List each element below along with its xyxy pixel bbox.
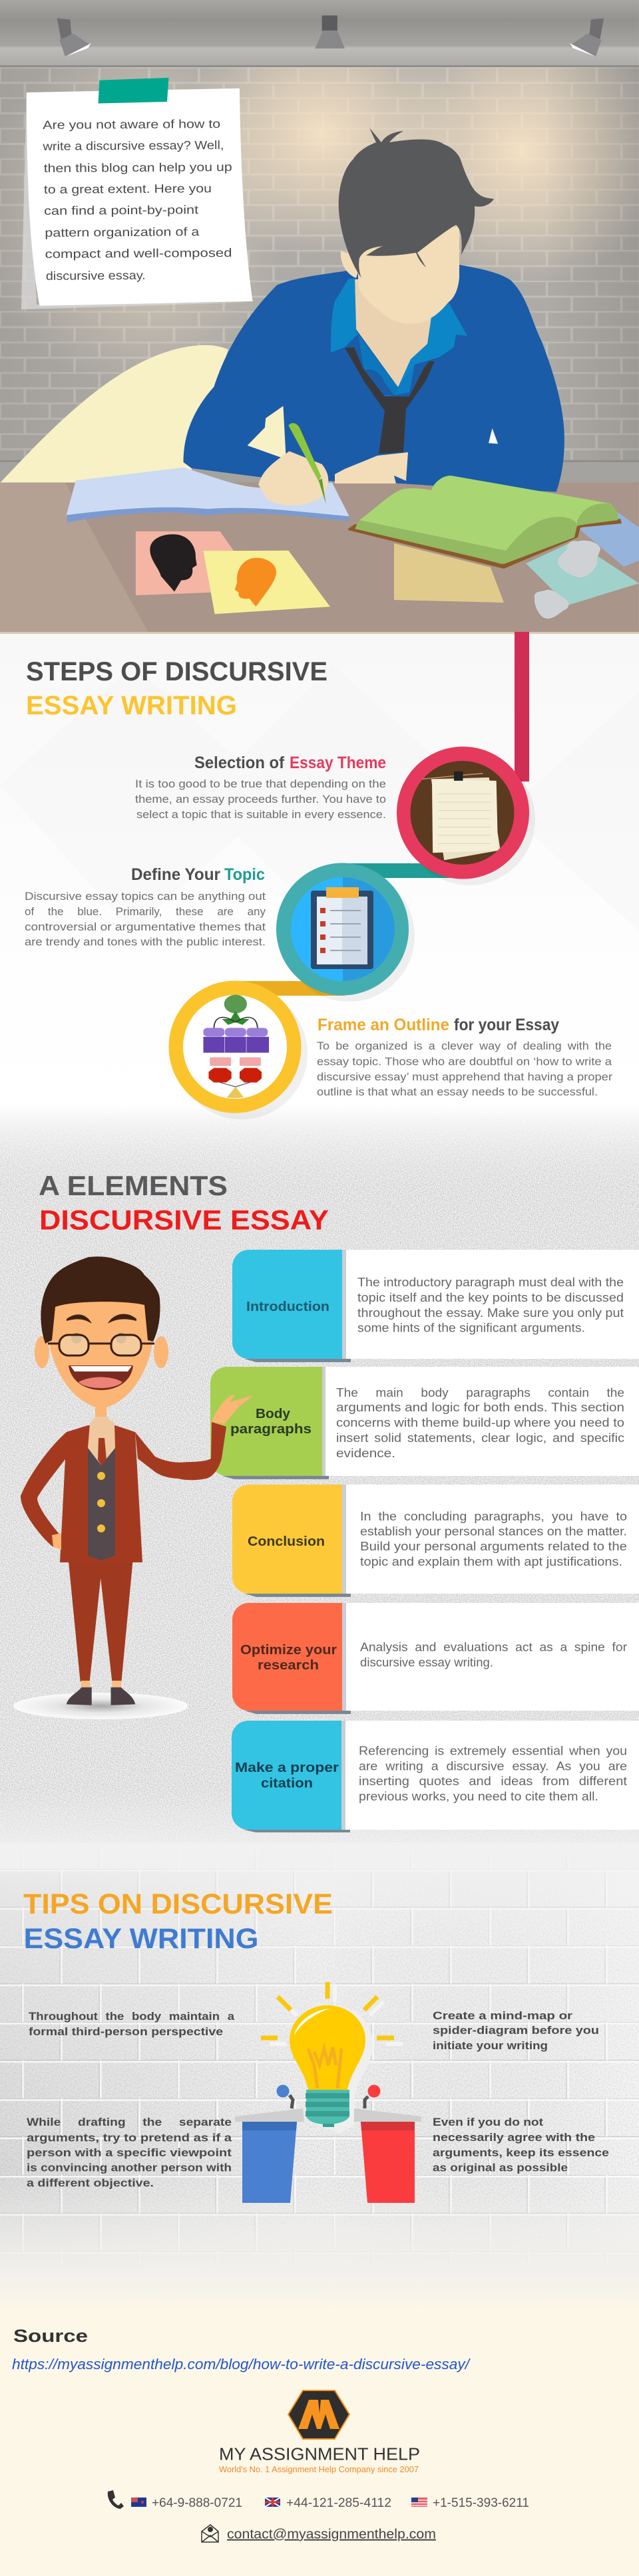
card: make a proper citation: Referencing is extremely essential when you <box>359 1745 627 1758</box>
desk <box>0 482 639 633</box>
green book <box>348 476 622 569</box>
text: tip 2: person with a specific viewpoint <box>27 2146 232 2159</box>
text: tip 3: spider-diagram before you <box>433 2024 599 2037</box>
left arm <box>21 1432 67 1547</box>
shirt <box>183 265 564 492</box>
panel: hero illustration <box>0 0 639 633</box>
collar <box>331 278 358 353</box>
text: tip 4: as original as possible <box>433 2162 568 2174</box>
intro text: compact and well-composed <box>45 246 232 261</box>
face <box>358 226 459 324</box>
lamp light cone <box>0 345 228 483</box>
intro text: pattern organization of a <box>45 225 200 239</box>
card: body paragraphs: insert solid statements, clear logic, and specific <box>336 1431 624 1445</box>
eyes <box>71 1333 82 1344</box>
logo: My Assignment Help: World's No. 1 Assignment Help Company since 2007 <box>219 2464 419 2474</box>
heading: tips: ESSAY WRITING <box>24 1923 258 1955</box>
intro text: write a discursive essay? Well, <box>42 138 224 153</box>
contact: phone numbers: +64-9-888-0721 <box>152 2496 242 2510</box>
filament <box>308 2047 341 2088</box>
card: introduction <box>232 1250 639 1362</box>
icon: phone <box>108 2490 124 2509</box>
text: step 1: It is too good to be true that depending on the <box>135 778 386 790</box>
intro text: can find a point-by-point <box>44 203 198 217</box>
vest <box>88 1447 115 1560</box>
glasses <box>59 1335 141 1356</box>
card: conclusion: In the concluding paragraphs, you have to <box>360 1510 627 1523</box>
card: body paragraphs: evidence. <box>336 1447 395 1460</box>
icon: right spotlight <box>570 19 604 57</box>
card: optimize your research <box>232 1603 639 1714</box>
tape <box>99 78 168 103</box>
panel: tips section background <box>0 1842 639 2576</box>
writing hand and pen <box>258 423 328 505</box>
heading: steps: ESSAY WRITING <box>26 691 237 720</box>
card: conclusion: topic and explain them with apt justifications. <box>360 1555 622 1568</box>
text: step 1: select a topic that is suitable in every essence. <box>136 808 386 821</box>
card: introduction: throughout the essay. Make sure you only put <box>357 1306 624 1320</box>
bulb <box>290 2005 365 2090</box>
text: step 3: essay topic. Those who are doubtful on ‘how to write a <box>317 1056 612 1068</box>
text: tip 2: is convincing another person with <box>27 2162 232 2174</box>
floor shadow <box>13 1693 188 1719</box>
source block: Source <box>13 2326 88 2346</box>
card: conclusion: Build your personal arguments related to the <box>360 1540 627 1553</box>
jacket <box>60 1425 142 1562</box>
icon: envelope <box>202 2525 218 2542</box>
icon: centre spotlight <box>315 15 345 49</box>
note: paper with intro text <box>21 78 253 309</box>
intro text: Are you not aware of how to <box>43 117 220 132</box>
logo: My Assignment Help: MY ASSIGNMENT HELP <box>219 2444 420 2464</box>
text: step 3: Frame an Outline <box>318 1016 449 1034</box>
ear <box>341 251 363 278</box>
card: introduction: The introductory paragraph must deal with the <box>357 1276 624 1289</box>
ears <box>35 1336 49 1368</box>
yellow card with orange head <box>203 551 330 614</box>
heading: tips <box>23 1888 333 1955</box>
man: writing student <box>183 128 564 492</box>
text: tip 1 <box>29 2010 235 2038</box>
icon: left spotlight <box>57 19 91 57</box>
connector: teal ribbon <box>342 863 452 878</box>
base <box>306 2090 349 2124</box>
hair <box>339 128 494 278</box>
text: tip 1: formal third-person perspective <box>29 2025 223 2038</box>
heading: steps: STEPS OF DISCURSIVE <box>26 657 327 686</box>
text: step 2 <box>25 865 266 948</box>
text: tip 2: While drafting the separate <box>27 2116 232 2128</box>
text: step 1 <box>135 754 386 821</box>
text: tip 4 <box>433 2116 609 2174</box>
card: body paragraphs <box>210 1367 639 1479</box>
text: tip 4: Even if you do not <box>433 2116 543 2128</box>
intro text <box>42 117 233 283</box>
card: conclusion: establish your personal stances on the matter. <box>360 1525 627 1538</box>
text: step 2: Topic <box>224 865 265 884</box>
source block <box>12 2326 471 2372</box>
loose papers <box>394 512 639 619</box>
card: body paragraphs: concerns with theme build-up where you need to <box>336 1416 624 1429</box>
wall: brick background <box>0 12 639 485</box>
neck and collar <box>95 1407 106 1427</box>
icon: step 1 circle with papers <box>397 746 535 885</box>
text: step 1: Essay Theme <box>290 754 386 772</box>
card: conclusion <box>232 1485 639 1597</box>
neck <box>355 277 459 387</box>
notebook <box>66 468 349 522</box>
heading: elements: DISCURSIVE ESSAY <box>39 1205 329 1236</box>
heading: elements <box>39 1170 329 1236</box>
text: tip 1: Throughout the body maintain a <box>29 2010 235 2023</box>
text: tip 4: necessarily agree with the <box>433 2131 595 2144</box>
text: step 2: Define Your <box>131 865 220 884</box>
contact: phone numbers: +1-515-393-6211 <box>433 2496 529 2510</box>
mouth <box>69 1365 133 1390</box>
card: make a proper citation: citation <box>261 1777 313 1791</box>
contact: phone numbers <box>108 2490 529 2510</box>
card: body paragraphs: paragraphs <box>230 1422 312 1437</box>
intro text: to a great extent. Here you <box>44 182 212 196</box>
icon: light bulb and two podiums <box>235 1982 421 2203</box>
flag: United Kingdom <box>265 2498 280 2507</box>
text: step 2: are trendy and tones with the public interest. <box>25 935 266 948</box>
card: make a proper citation: previous works, you need to cite them all. <box>359 1790 598 1803</box>
panel: elements section background <box>0 1104 639 1842</box>
flag: New Zealand <box>131 2498 146 2507</box>
heading: steps <box>26 657 327 720</box>
text: tip 3: Create a mind-map or <box>433 2009 572 2022</box>
connector: red ribbon <box>515 632 529 782</box>
heading: tips: TIPS ON DISCURSIVE <box>23 1888 333 1920</box>
icon: step 3 circle with outline diagram <box>169 980 308 1119</box>
text: step 2: Discursive essay topics can be anything out <box>25 890 266 903</box>
right hand <box>335 452 408 484</box>
tie <box>345 347 435 454</box>
blue podium <box>235 2108 304 2122</box>
card: body paragraphs: The main body paragraphs contain the <box>336 1386 624 1399</box>
ray shadows <box>270 1985 403 2044</box>
text: step 3: outline is that what an essay needs to be successful. <box>317 1085 598 1098</box>
heading: elements: A ELEMENTS <box>39 1170 228 1201</box>
red podium <box>354 2108 421 2122</box>
text: step 3: To be organized is a clever way of dealing with the <box>317 1040 612 1052</box>
card: introduction: Introduction <box>246 1300 329 1314</box>
rays <box>261 1982 394 2038</box>
contact: phone numbers: +44-121-285-4112 <box>286 2496 391 2510</box>
text: step 3: for your Essay <box>454 1016 559 1034</box>
text: step 2: controversial or argumentative themes that <box>25 921 266 933</box>
card: make a proper citation <box>232 1721 639 1832</box>
card: make a proper citation: Make a proper <box>235 1761 339 1775</box>
intro text: discursive essay. <box>46 269 146 283</box>
card: body paragraphs: arguments and logic for both ends. This section <box>336 1401 624 1414</box>
pointing hand <box>212 1395 253 1424</box>
text: tip 3: initiate your writing <box>433 2039 548 2052</box>
character: presenter in red suit <box>13 1256 253 1719</box>
panel: steps section background <box>0 632 639 1104</box>
text: step 1: theme, an essay proceeds further. You have to <box>135 793 386 805</box>
connector: yellow ribbon <box>235 981 345 996</box>
text: step 3: discursive essay’ must apprehend that having a proper <box>317 1071 612 1083</box>
card: introduction: topic itself and the key points to be discussed <box>357 1291 624 1304</box>
card: optimize your research: Analysis and evaluations act as a spine for <box>360 1641 627 1654</box>
hair <box>41 1256 160 1344</box>
text: step 1: Selection of <box>194 754 285 772</box>
source block: https://myassignmenthelp.com/blog/how-to-write-a-discursive-essay/ <box>12 2356 471 2372</box>
text: tip 2: a different objective. <box>27 2177 154 2190</box>
legs <box>69 1560 133 1681</box>
card: optimize your research: Optimize your <box>240 1643 337 1657</box>
intro text: then this blog can help you up <box>44 160 232 175</box>
card: optimize your research: discursive essay writing. <box>360 1656 493 1669</box>
text: step 3 <box>317 1016 612 1098</box>
text: tip 2 <box>27 2116 232 2190</box>
face <box>48 1300 154 1409</box>
text: tip 2: arguments, try to pretend as if a <box>27 2131 232 2144</box>
text: tip 3 <box>433 2009 599 2052</box>
bulb halo <box>310 2005 373 2134</box>
ceiling band <box>0 0 639 67</box>
card: introduction: some hints of the significant arguments. <box>357 1322 585 1335</box>
flag: United States <box>411 2498 427 2507</box>
icon: step 2 circle with clipboard <box>276 863 415 1002</box>
logo: My Assignment Help <box>219 2390 420 2474</box>
text: tip 4: arguments, keep its essence <box>433 2146 609 2159</box>
card: make a proper citation: are writing a discursive essay. As you are <box>359 1760 627 1773</box>
eyebrows <box>67 1314 136 1324</box>
pink card with black head <box>136 531 234 595</box>
contact: email: contact@myassignmenthelp.com <box>227 2527 436 2542</box>
card: conclusion: Conclusion <box>248 1534 325 1549</box>
text: step 2: of the blue. Primarily, these are any <box>25 905 266 918</box>
card: optimize your research: research <box>258 1658 319 1673</box>
card: make a proper citation: inserting quotes and ideas from different <box>359 1775 627 1788</box>
card: body paragraphs: Body <box>256 1407 291 1421</box>
right arm <box>135 1422 226 1480</box>
shoes <box>67 1687 135 1705</box>
